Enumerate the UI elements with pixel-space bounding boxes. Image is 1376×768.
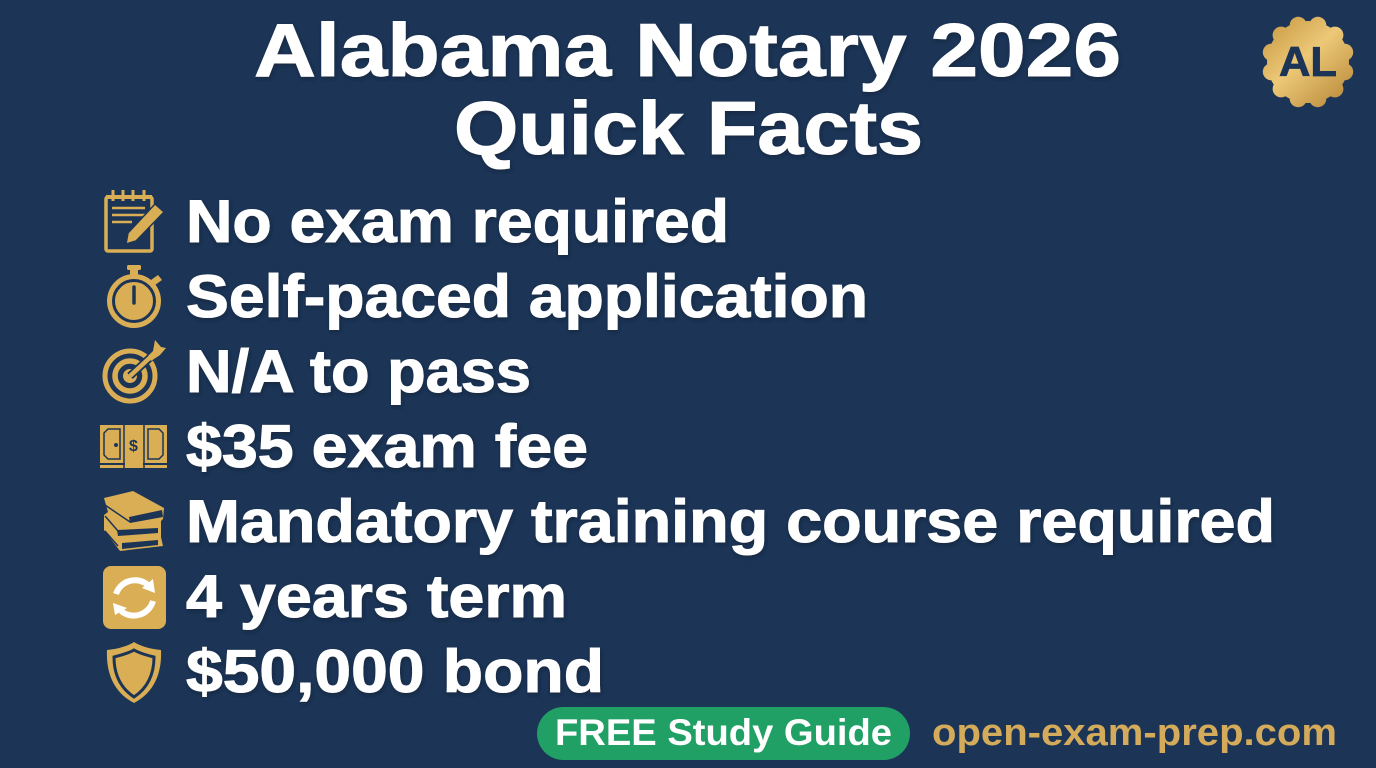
icon: stopwatch (107, 265, 162, 328)
button: free study guide: FREE Study Guide (555, 712, 892, 753)
badge: AL state seal: AL (1279, 38, 1337, 85)
text: mandatory training course required: Mandatory training course required (186, 488, 1275, 555)
icon: stack of books (104, 491, 164, 551)
text: N/A to pass: N/A to pass (186, 338, 531, 405)
text: no exam required: No exam required (186, 188, 729, 255)
title: Quick Facts (454, 86, 923, 170)
icon: target with arrow (105, 340, 166, 401)
text: $35 exam fee: $35 exam fee (186, 413, 588, 480)
icon: money bills: $ (129, 438, 138, 455)
icon: notepad and pencil (106, 190, 164, 251)
icon: money bills (100, 425, 167, 468)
title (254, 8, 1121, 170)
text: self-paced application: Self-paced application (186, 263, 868, 330)
text: $50,000 bond: $50,000 bond (186, 638, 604, 705)
text: 4 years term: 4 years term (186, 563, 567, 630)
icon: renewal arrows (103, 566, 166, 629)
icon: shield (107, 642, 161, 703)
badge: AL state seal (1263, 17, 1353, 107)
title: Alabama Notary 2026 (254, 8, 1121, 92)
button: free study guide (537, 707, 910, 760)
website url: open-exam-prep.com (932, 712, 1337, 754)
